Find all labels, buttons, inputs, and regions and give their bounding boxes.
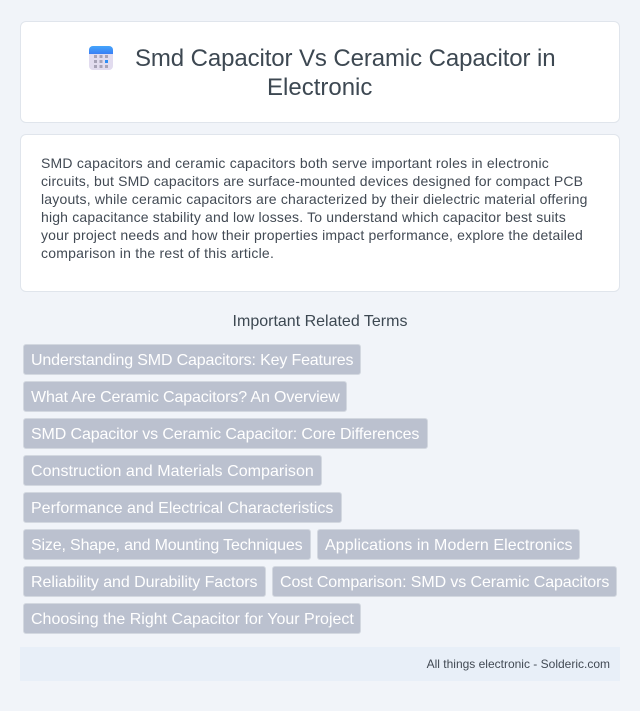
intro text: circuits, but SMD capacitors are surface-mounted devices designed for compact PCB xyxy=(41,173,583,189)
footer bar xyxy=(20,647,620,681)
chip: reliability xyxy=(23,566,266,597)
chip: choosing: Choosing the Right Capacitor for Your Project xyxy=(31,611,354,628)
header panel xyxy=(20,21,620,123)
chip: construction xyxy=(23,455,322,486)
chip: cost xyxy=(272,566,617,597)
title xyxy=(135,45,555,101)
chip: core differences xyxy=(23,418,428,449)
chip: applications: Applications in Modern Electronics xyxy=(325,537,573,554)
title: Electronic xyxy=(267,74,372,101)
intro text: SMD capacitors and ceramic capacitors both serve important roles in electronic xyxy=(41,155,549,171)
intro text: layouts, while ceramic capacitors are characterized by their dielectric material offering xyxy=(41,191,588,207)
chip: size xyxy=(23,529,311,560)
intro text: comparison in the rest of this article. xyxy=(41,245,274,261)
chip: applications xyxy=(317,529,580,560)
chip: core differences: SMD Capacitor vs Ceramic Capacitor: Core Differences xyxy=(31,426,419,443)
chip: what are: What Are Ceramic Capacitors? An Overview xyxy=(31,389,340,406)
chip: size: Size, Shape, and Mounting Techniques xyxy=(31,537,302,554)
chip: performance: Performance and Electrical Characteristics xyxy=(31,500,333,517)
chip: performance xyxy=(23,492,342,523)
title: Smd Capacitor Vs Ceramic Capacitor in xyxy=(135,45,555,72)
term chips xyxy=(23,344,617,634)
intro panel xyxy=(20,134,620,292)
chip: choosing xyxy=(23,603,361,634)
chip: cost: Cost Comparison: SMD vs Ceramic Capacitors xyxy=(280,574,609,591)
intro text: high capacitance stability and low losses. To understand which capacitor best suits xyxy=(41,209,566,225)
chip: reliability: Reliability and Durability Factors xyxy=(31,574,258,591)
chip: understanding xyxy=(23,344,361,375)
chip: what are xyxy=(23,381,347,412)
chip: understanding: Understanding SMD Capacitors: Key Features xyxy=(31,352,353,369)
chip: construction: Construction and Materials Comparison xyxy=(31,463,314,480)
intro text: your project needs and how their properties impact performance, explore the detailed xyxy=(41,227,583,243)
icon: calendar xyxy=(89,46,113,70)
intro text xyxy=(41,155,588,261)
footer text: All things electronic - Solderic.com xyxy=(427,657,610,671)
section heading: Important Related Terms xyxy=(233,313,407,330)
